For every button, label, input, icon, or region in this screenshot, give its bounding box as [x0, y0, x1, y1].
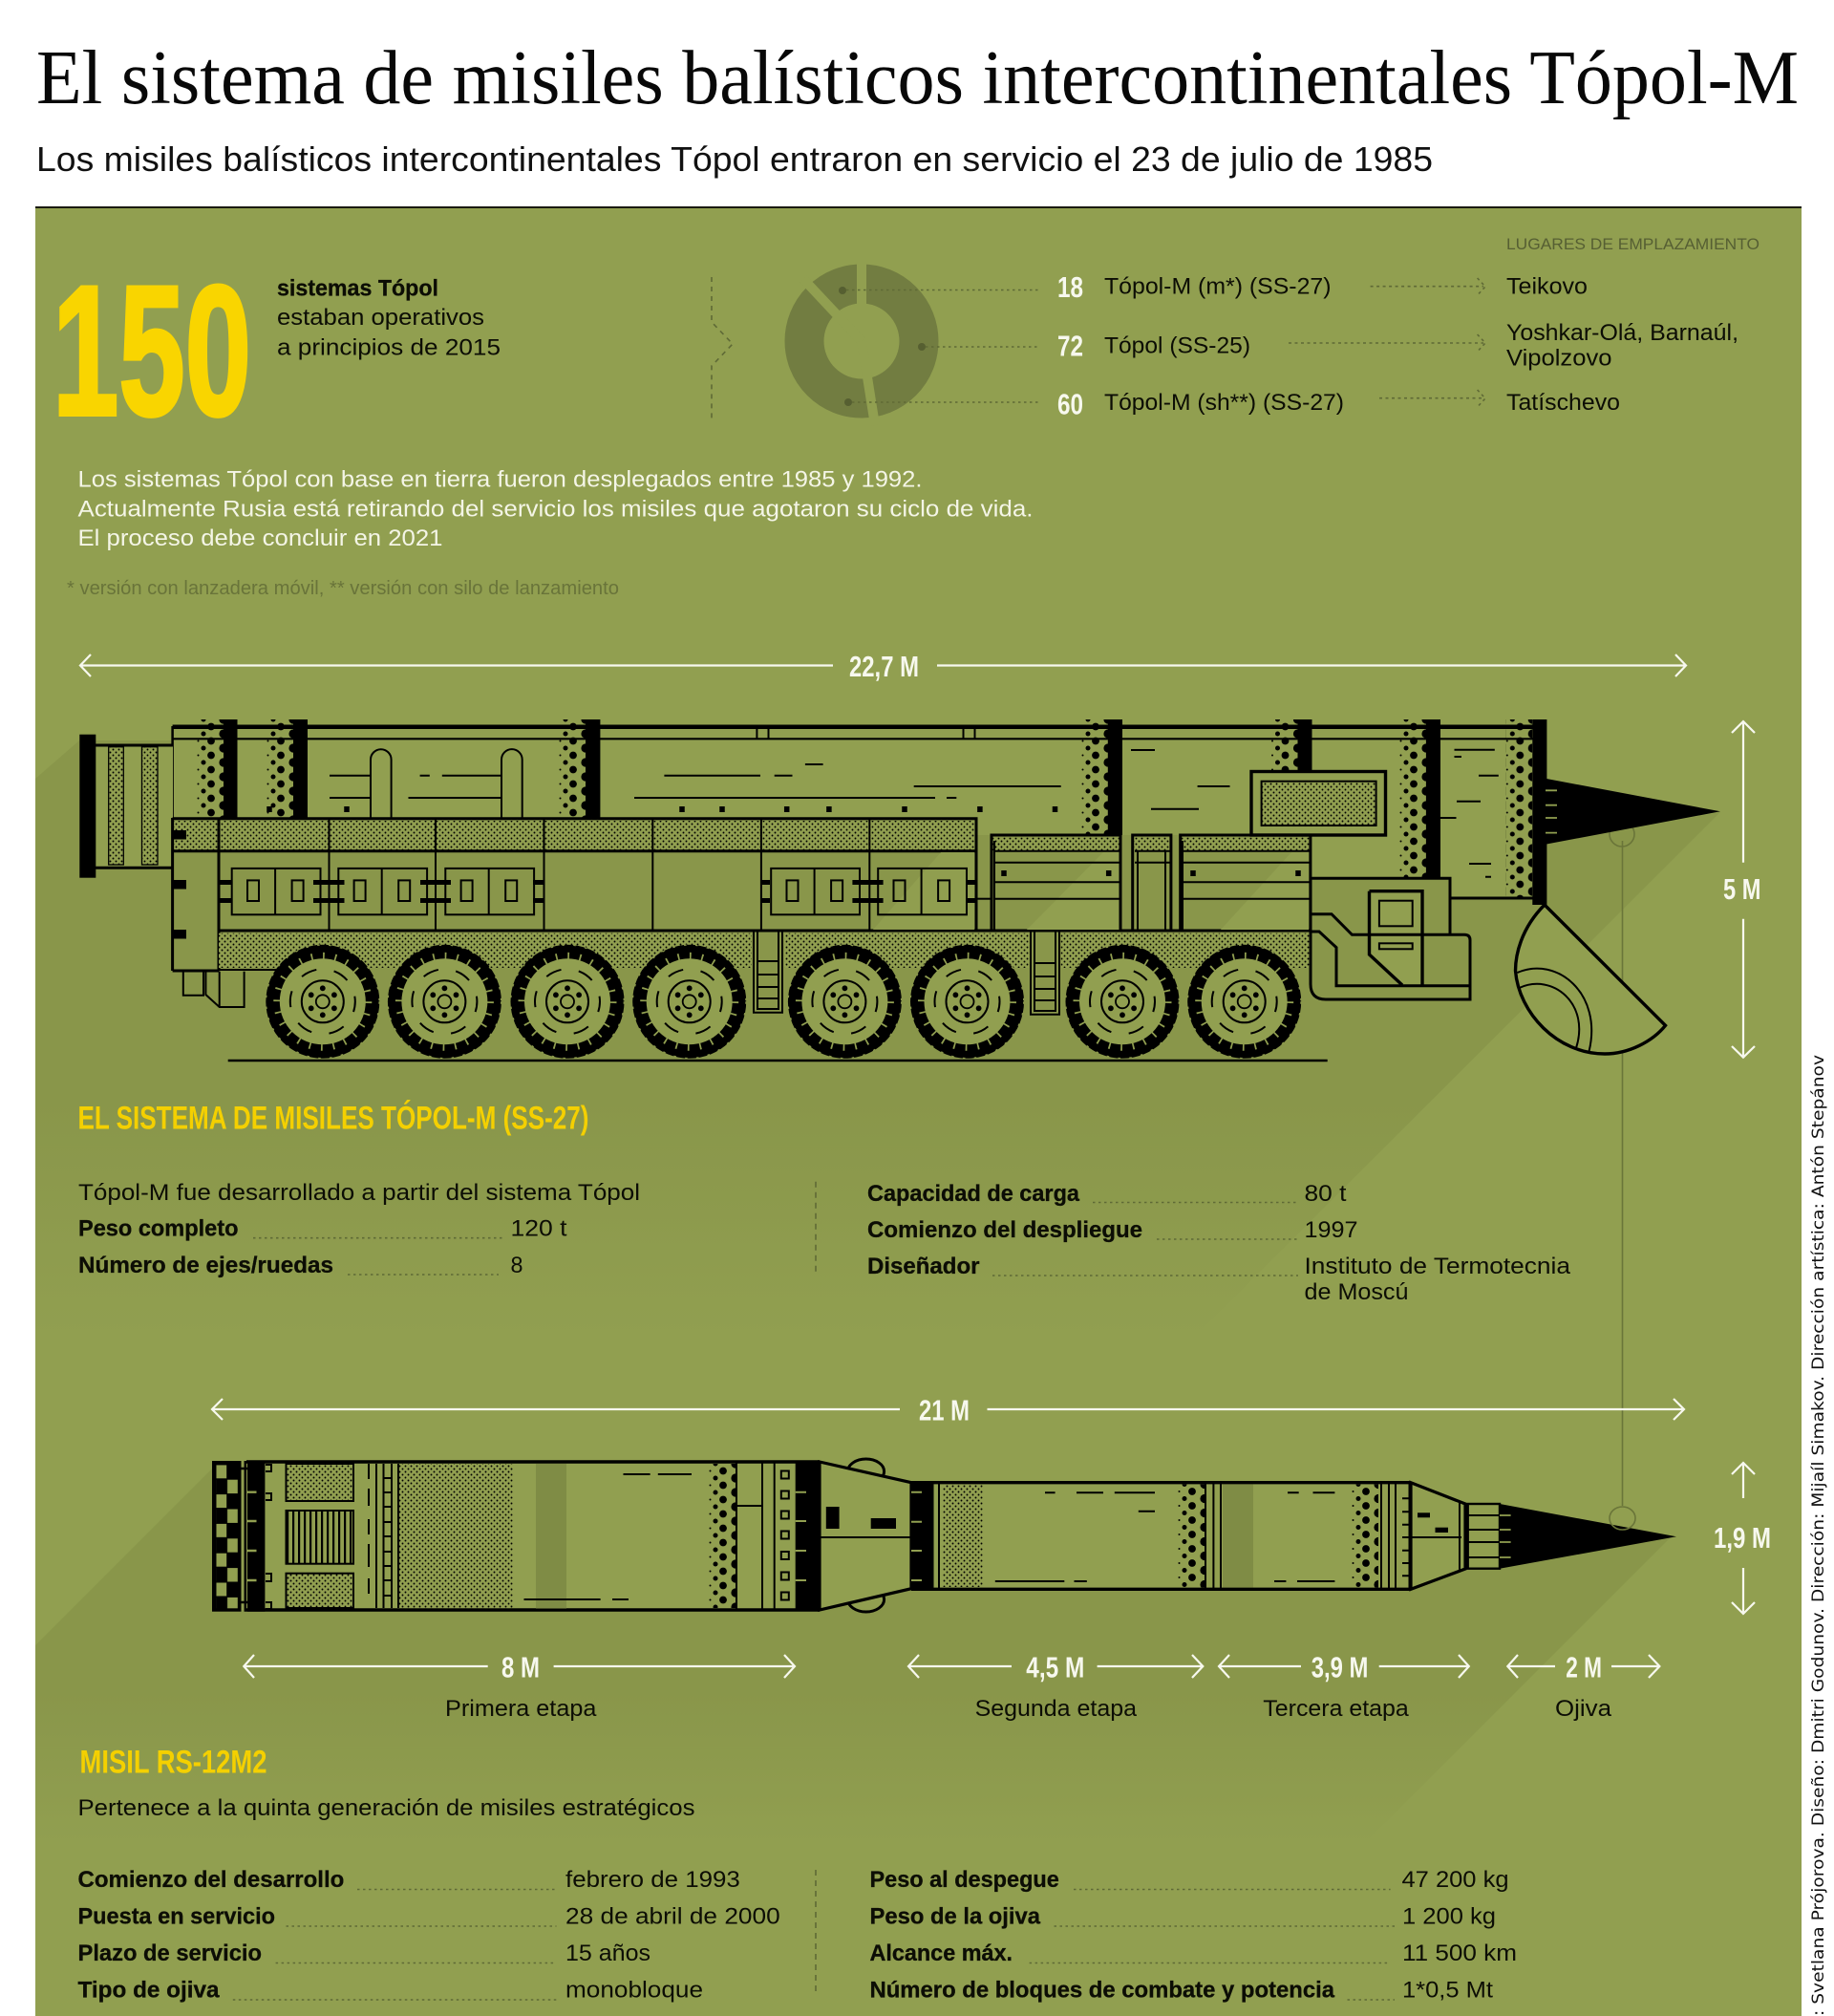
ground line — [228, 1060, 1328, 1062]
arrow: row 1 — [1371, 278, 1485, 295]
stage dimension: third stage — [1219, 1651, 1469, 1722]
missile specs: right column: Peso al despegue — [869, 1867, 1059, 1893]
dimension: truck length 22,7 M — [80, 650, 1686, 683]
missile specs: right column: Peso de la ojiva — [869, 1903, 1041, 1930]
specs: divider — [815, 1182, 817, 1274]
rear equipment boxes — [992, 835, 1311, 931]
specs: right column: 80 t — [1305, 1181, 1347, 1207]
specs: left column: 8 — [510, 1253, 523, 1278]
first interstage cone — [820, 1462, 911, 1610]
intro paragraph — [78, 466, 1034, 551]
specs: right column: Instituto de Termotecnia — [1305, 1254, 1571, 1279]
legend row: Tópol-M silo: Tópol-M (sh**) (SS-27) — [1104, 390, 1344, 416]
big number 150: 150 — [53, 247, 251, 455]
legend row: Tópol-M silo — [1057, 388, 1344, 420]
launch tube — [173, 719, 1546, 905]
second interstage cone — [1411, 1483, 1465, 1589]
intro paragraph: Los sistemas Tópol con base en tierra fueron desplegados entre 1985 y 1992. — [78, 466, 923, 492]
missile specs: left column: Comienzo del desarrollo — [78, 1867, 344, 1893]
truck launcher illustration — [79, 719, 1720, 1061]
missile specs: right column — [869, 1867, 1517, 2003]
arrow: row 2 — [1289, 334, 1485, 352]
locations list: Teikovo — [1506, 273, 1588, 300]
dimension: missile length 21 M: 21 M — [919, 1393, 970, 1427]
missile specs: right column: Alcance máx. — [869, 1941, 1013, 1966]
stage dimension: first stage: Primera etapa — [445, 1696, 597, 1722]
missile bumps — [848, 1459, 885, 1612]
specs: left column: Número de ejes/ruedas — [78, 1253, 333, 1278]
specs: left column: Tópol-M fue desarrollado a partir del sistema Tópol — [78, 1180, 640, 1206]
dashed bracket — [712, 277, 733, 418]
dimension: missile diameter 1,9 M — [1714, 1463, 1771, 1614]
dimension: missile length 21 M — [212, 1393, 1684, 1427]
specs: right column: Diseñador — [867, 1254, 980, 1279]
missile specs: left column: febrero de 1993 — [565, 1867, 740, 1893]
specs: right column: Comienzo del despliegue — [867, 1217, 1142, 1243]
missile specs: right column: 1 200 kg — [1402, 1903, 1496, 1930]
legend row: Tópol-M mobile: Tópol-M (m*) (SS-27) — [1104, 273, 1332, 300]
specs: right column: de Moscú — [1305, 1279, 1408, 1305]
missile specs: left column: Puesta en servicio — [78, 1903, 275, 1930]
stage dimension: warhead: 2 M — [1566, 1651, 1602, 1684]
subtitle: Los misiles balísticos intercontinentales Tópol entraron en servicio el 23 de julio de 1985 — [36, 139, 1433, 179]
dimension: truck height 5 M — [1723, 721, 1761, 1058]
first stage — [212, 1461, 820, 1612]
specs: left column — [78, 1180, 640, 1278]
missile specs: right column: 1*0,5 Mt — [1402, 1978, 1493, 2003]
text: operating systems: estaban operativos — [277, 305, 484, 331]
text: operating systems: a principios de 2015 — [277, 334, 501, 361]
missile specs: left column: Plazo de servicio — [78, 1941, 262, 1966]
warhead cone — [1500, 1504, 1676, 1569]
missile specs: divider — [815, 1870, 817, 1994]
stage dimension: first stage — [244, 1651, 795, 1722]
missile specs: left column: monobloque — [565, 1978, 703, 2003]
missile specs: right column: Número de bloques de combate y potencia — [869, 1978, 1335, 2003]
missile specs: left column — [78, 1867, 780, 2003]
missile specs: right column: 47 200 kg — [1402, 1867, 1509, 1893]
specs: left column: 120 t — [510, 1215, 567, 1242]
rear cylinder — [79, 735, 173, 878]
text: operating systems: sistemas Tópol — [277, 275, 438, 302]
dimension: truck length 22,7 M: 22,7 M — [849, 650, 919, 683]
locations heading: LUGARES DE EMPLAZAMIENTO — [1506, 235, 1759, 253]
locations list — [1506, 273, 1738, 416]
legend row: Tópol-M silo: 60 — [1057, 388, 1083, 420]
dimension: missile diameter 1,9 M: 1,9 M — [1714, 1521, 1771, 1555]
text: operating systems — [277, 275, 501, 361]
missile intro text: Pertenece a la quinta generación de misiles estratégicos — [78, 1795, 695, 1821]
legend row: Tópol-M mobile — [1057, 270, 1332, 304]
intro paragraph: Actualmente Rusia está retirando del servicio los misiles que agotaron su ciclo de vida. — [78, 497, 1034, 523]
legend row: Tópol: 72 — [1057, 329, 1083, 363]
connector line between truck and missile — [1610, 822, 1634, 1506]
missile illustration — [212, 1459, 1676, 1612]
second stage — [911, 1482, 1411, 1590]
section heading: missile: MISIL RS-12M2 — [80, 1745, 267, 1781]
credits: : Svetlana Prójorova. Diseño: Dmitri Godunov. Dirección: Mijaíl Simakov. Dirección artística: Antón Stepánov — [1809, 1055, 1828, 2016]
legend row: Tópol: Tópol (SS-25) — [1104, 332, 1250, 359]
wheels — [266, 945, 1301, 1059]
specs: left column: Peso completo — [78, 1215, 239, 1242]
missile specs: right column: 11 500 km — [1402, 1941, 1517, 1966]
intro paragraph: El proceso debe concluir en 2021 — [78, 525, 442, 551]
stage dimension: second stage: Segunda etapa — [975, 1696, 1138, 1722]
donut leader lines — [846, 290, 1040, 402]
missile specs: left column: 15 años — [565, 1941, 650, 1966]
arrow: row 3 — [1379, 390, 1485, 407]
chassis band and ladders — [183, 932, 1309, 1015]
main platform body — [173, 818, 1311, 971]
missile specs: left column: 28 de abril de 2000 — [565, 1903, 780, 1930]
stage dimension: first stage: 8 M — [501, 1651, 540, 1684]
specs: right column — [867, 1181, 1571, 1305]
missile ring marker — [1610, 1507, 1635, 1530]
truck cab — [1311, 877, 1470, 999]
specs: right column: Capacidad de carga — [867, 1181, 1080, 1207]
third stage — [1223, 1483, 1410, 1589]
stage dimension: second stage: 4,5 M — [1026, 1651, 1084, 1684]
stage dimension: second stage — [908, 1651, 1203, 1722]
half-dome nose fairing — [1515, 905, 1666, 1054]
donut chart — [803, 256, 926, 425]
dimension: truck height 5 M: 5 M — [1723, 872, 1761, 906]
missile specs: left column: Tipo de ojiva — [78, 1978, 220, 2003]
warhead base — [1468, 1504, 1500, 1569]
stage dimension: warhead — [1507, 1651, 1659, 1722]
locations list: Tatíschevo — [1506, 390, 1620, 416]
title: El sistema de misiles balísticos intercontinentales Tópol-M — [36, 36, 1799, 120]
specs: right column: 1997 — [1305, 1217, 1358, 1243]
footnote: * versión con lanzadera móvil, ** versión con silo de lanzamiento — [67, 578, 619, 599]
stage dimension: warhead: Ojiva — [1555, 1696, 1612, 1722]
warhead nose cone — [1546, 779, 1720, 845]
stage dimension: third stage: 3,9 M — [1312, 1651, 1368, 1684]
stage dimension: third stage: Tercera etapa — [1263, 1696, 1409, 1722]
legend row: Tópol-M mobile: 18 — [1057, 270, 1083, 304]
legend row: Tópol — [1057, 329, 1250, 363]
locations list: Yoshkar-Olá, Barnaúl, — [1506, 320, 1738, 346]
locations list: Vipolzovo — [1506, 346, 1612, 371]
control panel box — [1251, 772, 1385, 835]
section heading: Topol-M system: EL SISTEMA DE MISILES TÓPOL-M (SS-27) — [78, 1101, 588, 1137]
